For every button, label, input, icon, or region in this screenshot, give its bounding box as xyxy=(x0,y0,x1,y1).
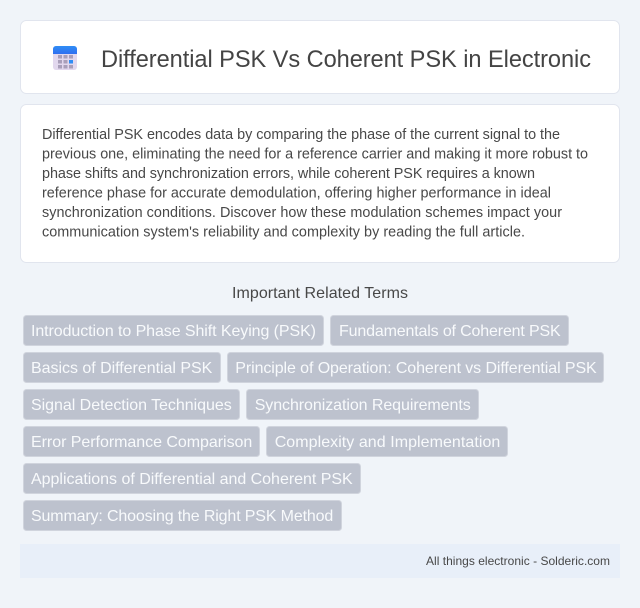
footer: All things electronic - Solderic.com xyxy=(426,554,610,568)
tag: fundamentals: Fundamentals of Coherent PSK xyxy=(339,323,561,340)
text block: description: reference phase for accurate demodulation, offering higher performance in ideal xyxy=(42,186,551,202)
tag: applications: Applications of Differential and Coherent PSK xyxy=(31,471,353,488)
tag: summary: Summary: Choosing the Right PSK Method xyxy=(31,508,333,525)
text block: description: communication system's reliability and complexity by reading the full article. xyxy=(42,224,525,240)
tag: error performance: Error Performance Comparison xyxy=(31,434,252,451)
footer xyxy=(20,544,620,578)
heading: related terms: Important Related Terms xyxy=(232,285,408,302)
tag: synchronization: Synchronization Requirements xyxy=(255,397,471,414)
tag: synchronization xyxy=(246,390,478,420)
tag: principle: Principle of Operation: Coherent vs Differential PSK xyxy=(235,360,597,377)
tag: complexity: Complexity and Implementation xyxy=(275,434,500,451)
text block: description: Differential PSK encodes data by comparing the phase of the current signal to the xyxy=(42,127,560,143)
tag: signal detection xyxy=(24,390,240,420)
tag: basics: Basics of Differential PSK xyxy=(31,360,213,377)
icon: calendar xyxy=(53,46,77,70)
tag: basics xyxy=(24,352,220,382)
text block: description: previous one, eliminating the need for a reference carrier and making it more robust to xyxy=(42,146,588,162)
panel: description xyxy=(20,104,620,262)
tag: signal detection: Signal Detection Techniques xyxy=(31,397,232,414)
panel: term tags xyxy=(24,316,604,530)
tag: summary xyxy=(24,500,342,530)
text block: description: synchronization conditions. Discover how these modulation schemes impact your xyxy=(42,205,562,221)
tag: introduction: Introduction to Phase Shift Keying (PSK) xyxy=(31,323,316,340)
panel: title card xyxy=(20,20,620,94)
tag: applications xyxy=(24,464,360,494)
tag: principle xyxy=(228,352,604,382)
tag: complexity xyxy=(266,426,508,456)
tag: fundamentals xyxy=(330,316,568,346)
text block: description: phase shifts and synchronization errors, while coherent PSK requires a known xyxy=(42,166,535,182)
tag: error performance xyxy=(24,426,260,456)
tag: introduction xyxy=(24,316,324,346)
title: Differential PSK Vs Coherent PSK in Electronic xyxy=(101,47,591,73)
text block: description xyxy=(42,127,588,240)
